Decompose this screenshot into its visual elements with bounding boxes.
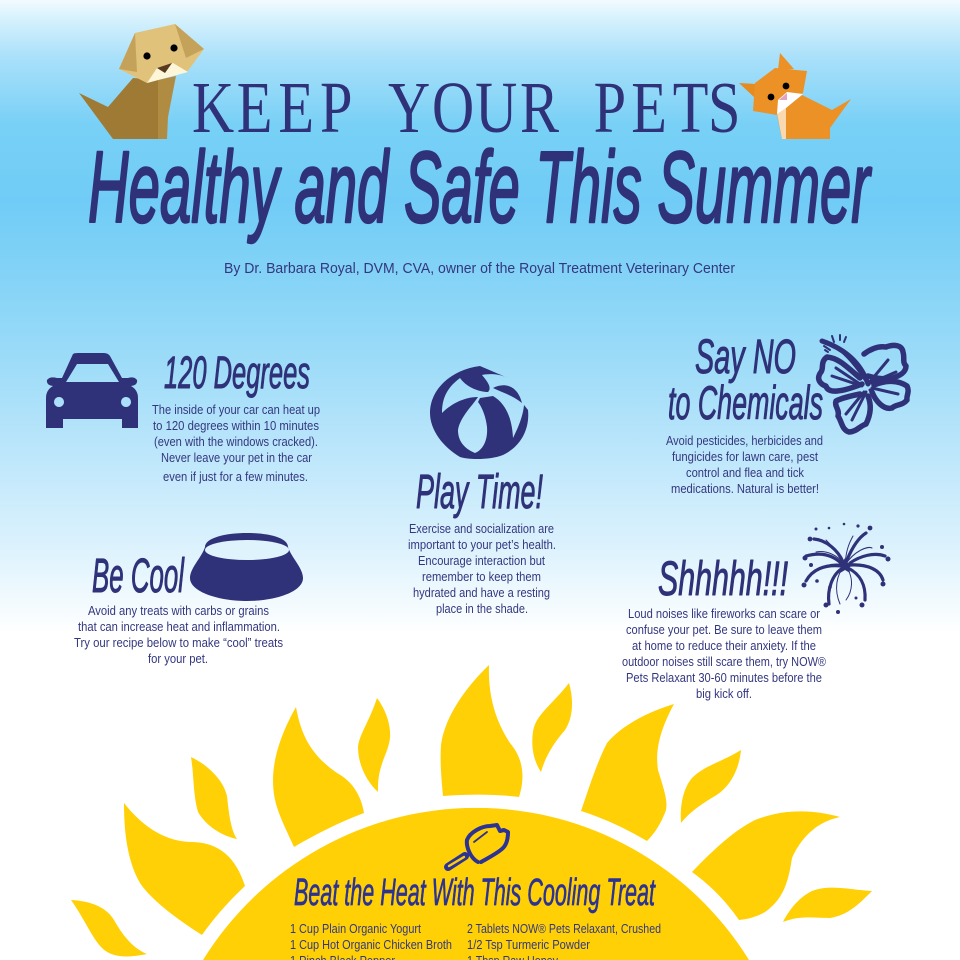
body text: treats: Avoid any treats with carbs or grains xyxy=(88,603,269,618)
icon: beach ball xyxy=(430,366,528,459)
body text: car xyxy=(152,402,320,484)
heading: shhhhh: Shhhhh!!! xyxy=(658,553,788,606)
body text: chemicals: control and flea and tick xyxy=(686,465,804,480)
heading: be cool: Be Cool xyxy=(92,550,185,603)
body text: exercise: remember to keep them xyxy=(422,569,541,584)
body text: noises: big kick off. xyxy=(696,686,752,701)
heading: play time: Play Time! xyxy=(416,466,543,519)
icon: origami dog xyxy=(79,24,204,139)
body text: noises: Pets Relaxant 30-60 minutes before the xyxy=(626,670,822,685)
recipe ingredients: 1 Cup Plain Organic Yogurt xyxy=(290,921,421,936)
byline: By Dr. Barbara Royal, DVM, CVA, owner of the Royal Treatment Veterinary Center xyxy=(224,260,735,277)
heading: say no: Say NO xyxy=(695,331,796,384)
sun disc xyxy=(203,808,749,960)
body text: car: The inside of your car can heat up xyxy=(152,402,320,417)
body text: noises: confuse your pet. Be sure to leave them xyxy=(626,622,822,637)
body text: chemicals: Avoid pesticides, herbicides and xyxy=(666,433,823,448)
body text: treats: that can increase heat and inflammation. xyxy=(78,619,280,634)
body text: exercise: place in the shade. xyxy=(436,601,528,616)
body text: treats: Try our recipe below to make “cool” treats xyxy=(74,635,283,650)
heading: 120 degrees: 120 Degrees xyxy=(164,347,310,398)
body text: exercise: important to your pet’s health. xyxy=(408,537,556,552)
body text: treats xyxy=(74,603,283,666)
heading: beat the heat: Beat the Heat With This Cooling Treat xyxy=(294,872,656,914)
icon: bowl xyxy=(190,533,303,601)
sun rays xyxy=(71,665,872,956)
panel: say no to chemicals xyxy=(666,331,908,496)
icon: hibiscus xyxy=(819,335,908,432)
body text: chemicals: fungicides for lawn care, pest xyxy=(672,449,818,464)
body text: exercise xyxy=(408,521,556,616)
recipe ingredients: 1 Cup Hot Organic Chicken Broth xyxy=(290,937,452,952)
body text: chemicals xyxy=(666,433,823,496)
body text: noises: outdoor noises still scare them, try NOW® xyxy=(622,654,826,669)
body text: noises: at home to reduce their anxiety. If the xyxy=(632,638,816,653)
panel: play time xyxy=(408,366,556,616)
recipe ingredients xyxy=(290,921,661,960)
recipe ingredients: 2 Tablets NOW® Pets Relaxant, Crushed xyxy=(467,921,661,936)
icon: origami cat xyxy=(739,53,851,139)
body text: chemicals: medications. Natural is better! xyxy=(671,481,819,496)
body text: exercise: Exercise and socialization are xyxy=(409,521,554,536)
recipe ingredients: 1/2 Tsp Turmeric Powder xyxy=(467,937,591,952)
body text: treats: for your pet. xyxy=(148,651,208,666)
heading: to chemicals: to Chemicals xyxy=(668,376,823,429)
body text: car: to 120 degrees within 10 minutes xyxy=(153,418,319,433)
panel: sun recipe xyxy=(203,808,749,960)
body text: exercise: hydrated and have a resting xyxy=(413,585,550,600)
body text: car: (even with the windows cracked). xyxy=(154,434,318,449)
icon: car xyxy=(46,353,138,428)
title: keep your pets: KEEP YOUR PETS xyxy=(192,68,740,149)
body text: exercise: Encourage interaction but xyxy=(418,553,545,568)
panel: be cool xyxy=(74,533,303,666)
panel: shhhhh xyxy=(622,523,890,701)
panel: 120 degrees xyxy=(46,347,320,484)
body text: car: Never leave your pet in the car xyxy=(161,450,313,465)
body text: car: even if just for a few minutes. xyxy=(163,469,308,484)
icon: fireworks xyxy=(802,523,890,614)
body text: noises xyxy=(622,606,826,701)
body text: noises: Loud noises like fireworks can scare or xyxy=(628,606,821,621)
icon: ice cream xyxy=(448,825,508,867)
